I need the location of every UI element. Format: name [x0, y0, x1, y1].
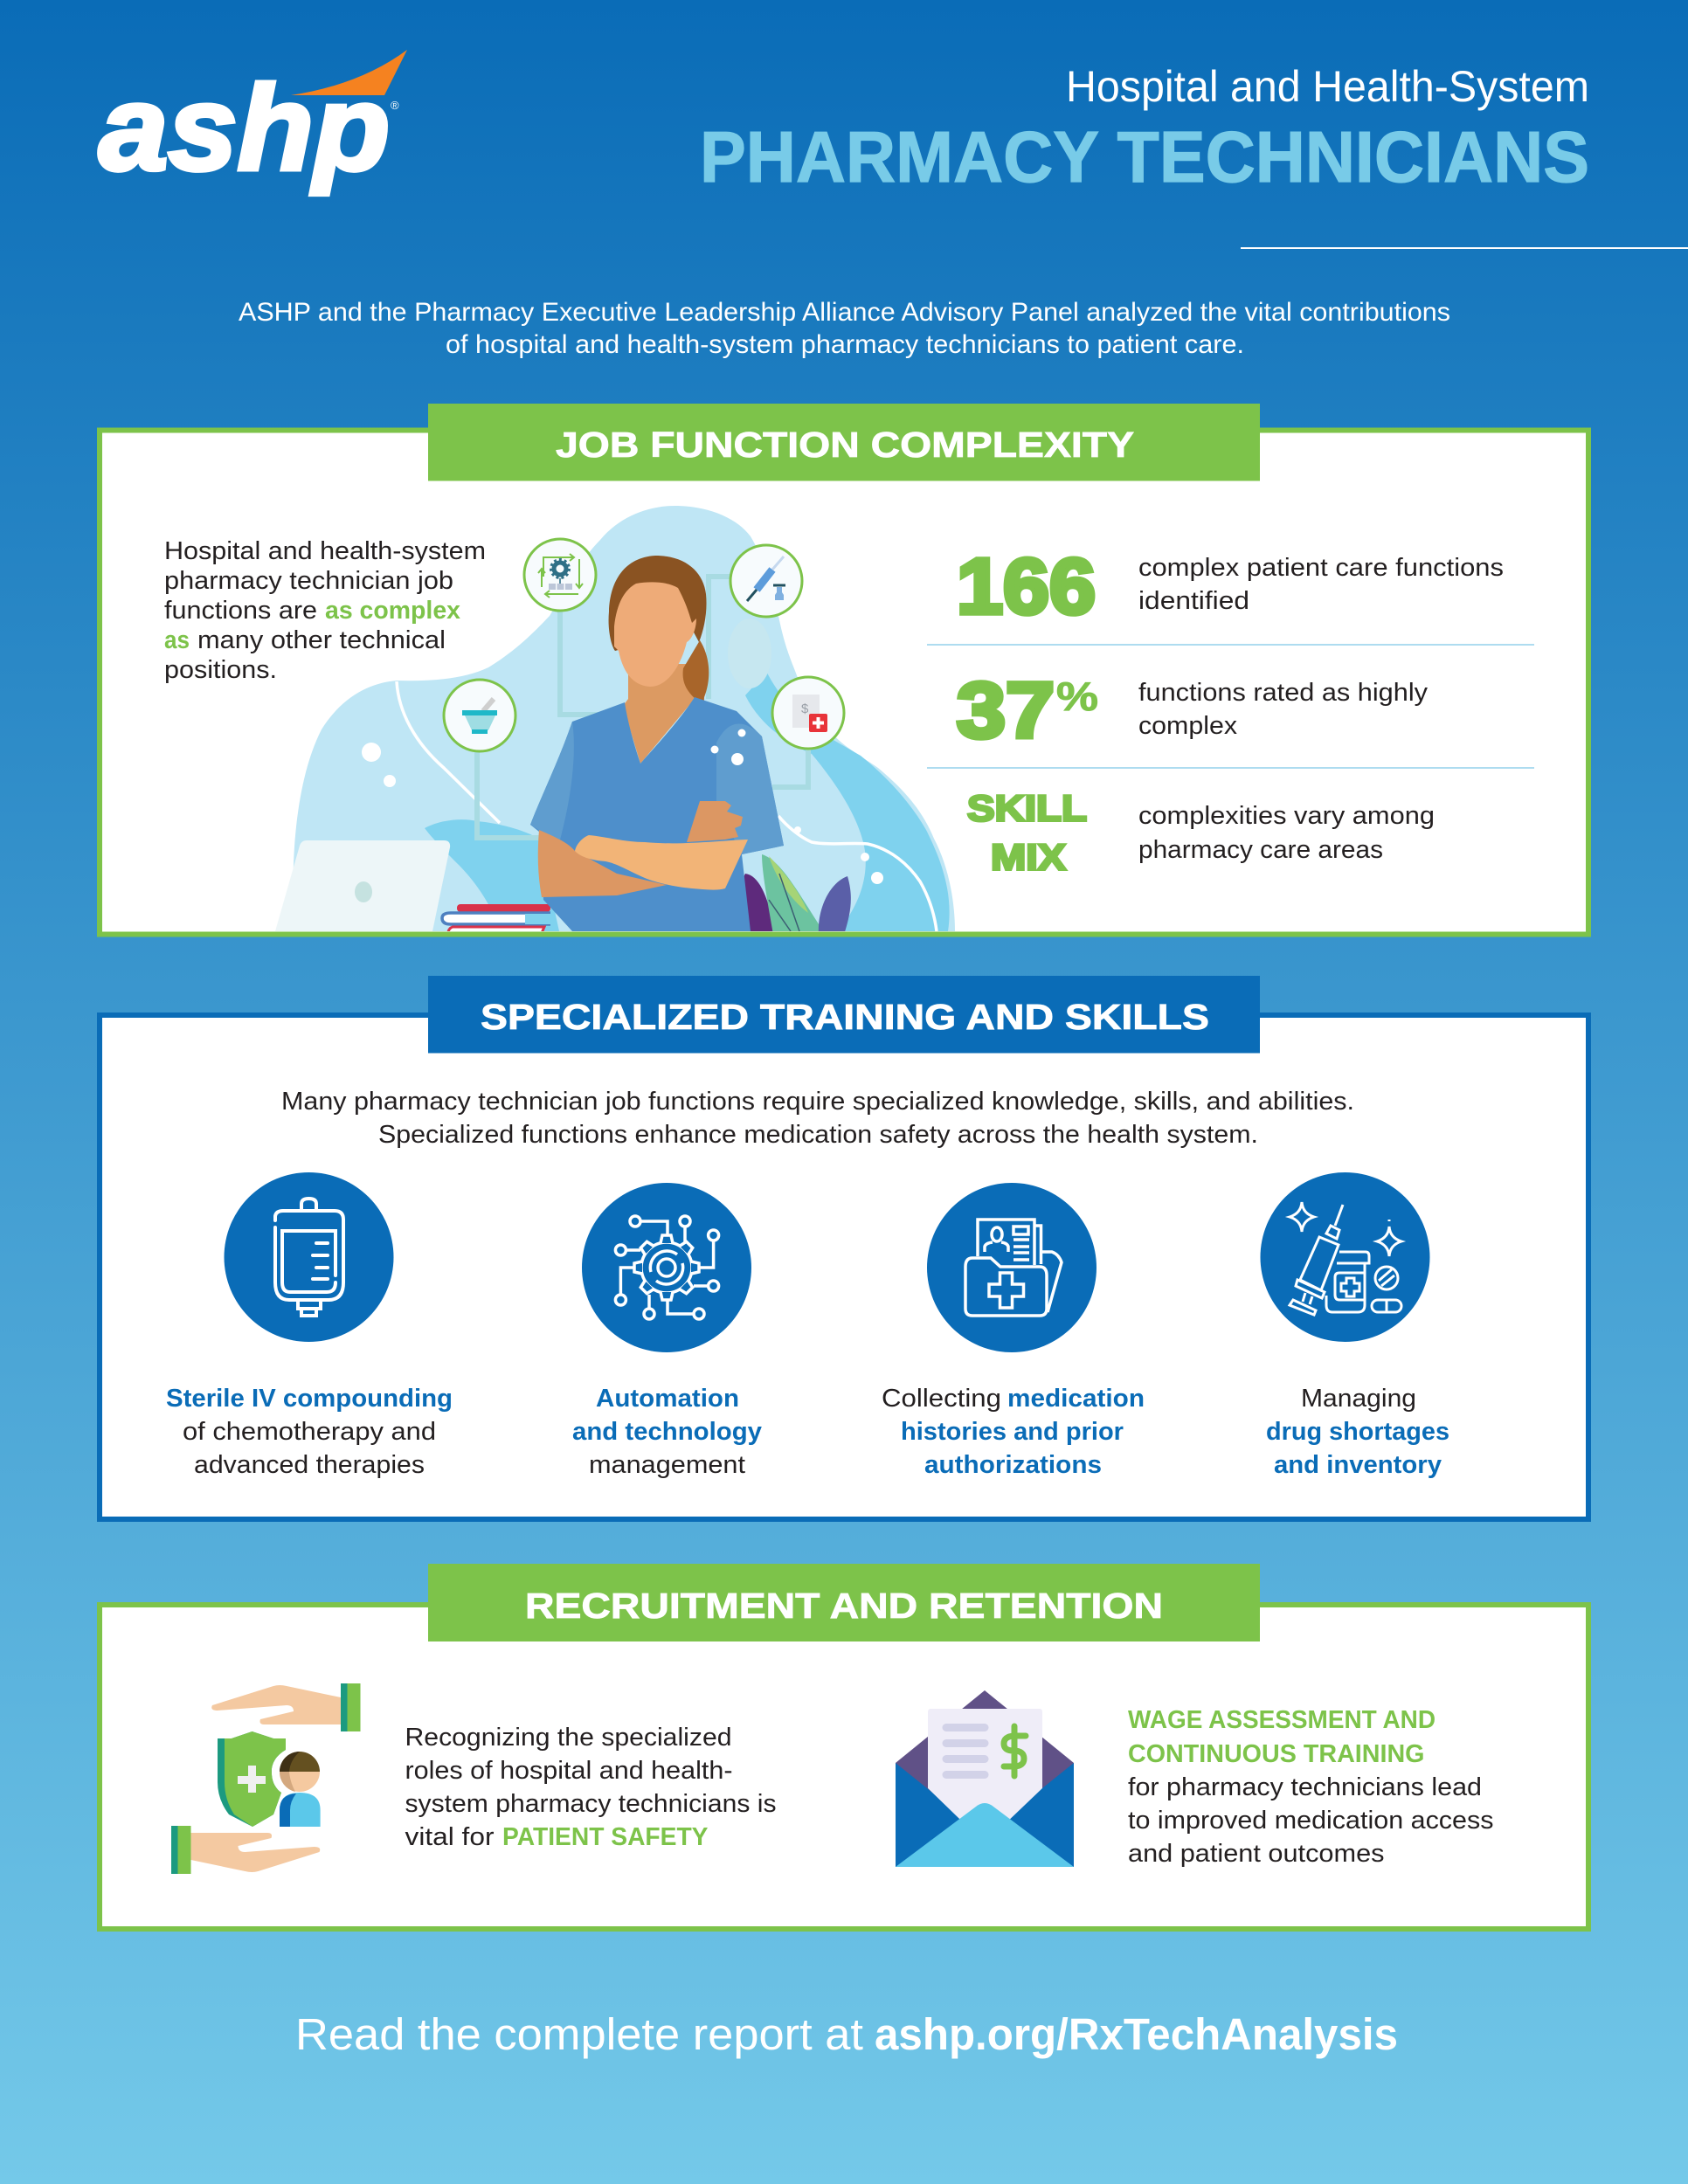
stat: 37 percent: complex [1138, 712, 1238, 740]
text: wage assessment: CONTINUOUS TRAINING [1128, 1740, 1424, 1768]
laptop [275, 840, 450, 931]
skill caption: drug shortages [1266, 1385, 1449, 1479]
skill caption: medication histories: medication [1007, 1385, 1145, 1413]
skill caption: drug shortages: drug shortages [1266, 1418, 1449, 1446]
text: wage assessment: to improved medication access [1128, 1807, 1494, 1835]
title: PHARMACY TECHNICIANS [700, 116, 1589, 197]
footer call to action [295, 2009, 1398, 2059]
text: wage assessment: and patient outcomes [1128, 1840, 1384, 1868]
text: training intro: Many pharmacy technician job functions require specialized knowledge, skills, and abilities. [281, 1088, 1354, 1116]
text: complexity description [164, 537, 486, 684]
icon: workflow gear [524, 539, 596, 611]
plant [741, 854, 851, 935]
heading: job function complexity: JOB FUNCTION COMPLEXITY [556, 425, 1134, 465]
icon: hands protecting person [171, 1683, 360, 1874]
skill caption: medication histories: histories and prior [901, 1418, 1124, 1446]
text: complexity description: pharmacy technician job [164, 567, 453, 595]
skill caption: medication histories [882, 1385, 1145, 1479]
panel: specialized training and skills [100, 976, 1588, 1519]
stat: skill mix: pharmacy care areas [1138, 836, 1383, 864]
skill caption: sterile IV compounding: of chemotherapy and [183, 1418, 436, 1446]
text: complexity description: many other technical [197, 626, 446, 654]
illustration: pharmacy technician [275, 506, 955, 935]
skill caption: automation and technology [572, 1385, 762, 1479]
text: wage assessment [1128, 1706, 1494, 1868]
intro text: of hospital and health-system pharmacy technicians to patient care. [446, 330, 1244, 359]
skill caption: medication histories: authorizations [924, 1451, 1102, 1479]
stat: 166: identified [1138, 587, 1249, 615]
icon: receipt with medical cross [772, 677, 844, 749]
footer call to action: ashp.org/RxTechAnalysis [875, 2009, 1398, 2059]
icon: automation gear [582, 1183, 751, 1352]
stat: skill mix: MIX [991, 837, 1066, 877]
text: wage assessment: for pharmacy technicians lead [1128, 1773, 1482, 1801]
stat: skill mix [967, 788, 1435, 877]
text: patient safety: Recognizing the specialized [405, 1724, 732, 1752]
heading: job function complexity [428, 404, 1260, 480]
skill caption: medication histories: Collecting [882, 1385, 1001, 1413]
text: patient safety: vital for [405, 1823, 495, 1851]
skill caption: automation and technology: management [589, 1451, 745, 1479]
stat: skill mix: SKILL [967, 788, 1087, 828]
panel: recruitment and retention [100, 1564, 1588, 1929]
skill caption: automation and technology: Automation [596, 1385, 739, 1413]
intro text: ASHP and the Pharmacy Executive Leadership Alliance Advisory Panel analyzed the vital contributions [239, 298, 1450, 327]
text: training intro [281, 1088, 1354, 1149]
title: Hospital and Health-System [1066, 62, 1589, 111]
text: wage assessment: WAGE ASSESSMENT AND [1128, 1706, 1435, 1734]
skill caption: drug shortages: Managing [1301, 1385, 1416, 1413]
icon: syringe and medication [1260, 1172, 1429, 1342]
connector lines [477, 577, 808, 838]
intro text [239, 298, 1450, 359]
skill caption: sterile IV compounding: Sterile IV compounding [166, 1385, 453, 1413]
icon: mortar and pestle [444, 680, 515, 751]
stat: 37 percent [957, 667, 1429, 755]
icon: syringe and vial [730, 545, 802, 617]
skill caption: sterile IV compounding: advanced therapies [194, 1451, 425, 1479]
text: patient safety: roles of hospital and health- [405, 1757, 732, 1785]
panel: job function complexity [100, 404, 1588, 935]
text: complexity description: as [164, 626, 190, 654]
stat: 166: 166 [957, 543, 1096, 631]
heading: recruitment and retention [428, 1564, 1260, 1641]
text: patient safety: PATIENT SAFETY [502, 1823, 708, 1851]
person [530, 556, 784, 931]
text: patient safety [405, 1724, 776, 1851]
heading: specialized training and skills: SPECIALIZED TRAINING AND SKILLS [481, 997, 1209, 1037]
skill caption: sterile IV compounding [166, 1385, 453, 1479]
heading: specialized training and skills [428, 976, 1260, 1054]
stat: 37 percent: functions rated as highly [1138, 679, 1429, 707]
books [442, 904, 551, 933]
title [700, 62, 1589, 197]
text: complexity description: functions are [164, 597, 317, 625]
text: training intro: Specialized functions enhance medication safety across the health system. [378, 1121, 1258, 1149]
stat: 166: complex patient care functions [1138, 554, 1504, 582]
stat: skill mix: complexities vary among [1138, 802, 1435, 830]
text: complexity description: positions. [164, 656, 277, 684]
text: complexity description: Hospital and health-system [164, 537, 486, 565]
icon: medical folder [927, 1183, 1097, 1352]
text: patient safety: system pharmacy technicians is [405, 1790, 776, 1818]
icon: envelope with pay statement [896, 1690, 1074, 1867]
text: complexity description: as complex [325, 597, 460, 625]
icon: receipt with medical cross: $ [801, 702, 809, 716]
heading: recruitment and retention: RECRUITMENT AND RETENTION [525, 1586, 1163, 1626]
skill caption: drug shortages: and inventory [1274, 1451, 1442, 1479]
logo: ashp: ® [391, 99, 399, 112]
icon: IV bag [224, 1172, 393, 1342]
stat: 37 percent: 37 [957, 667, 1055, 755]
decorative dots [362, 743, 883, 884]
stat: 166 [957, 543, 1504, 631]
footer call to action: Read the complete report at [295, 2009, 863, 2059]
logo: ashp: ashp [99, 61, 390, 196]
skill caption: automation and technology: and technology [572, 1418, 762, 1446]
stat: 37 percent: % [1056, 674, 1098, 719]
